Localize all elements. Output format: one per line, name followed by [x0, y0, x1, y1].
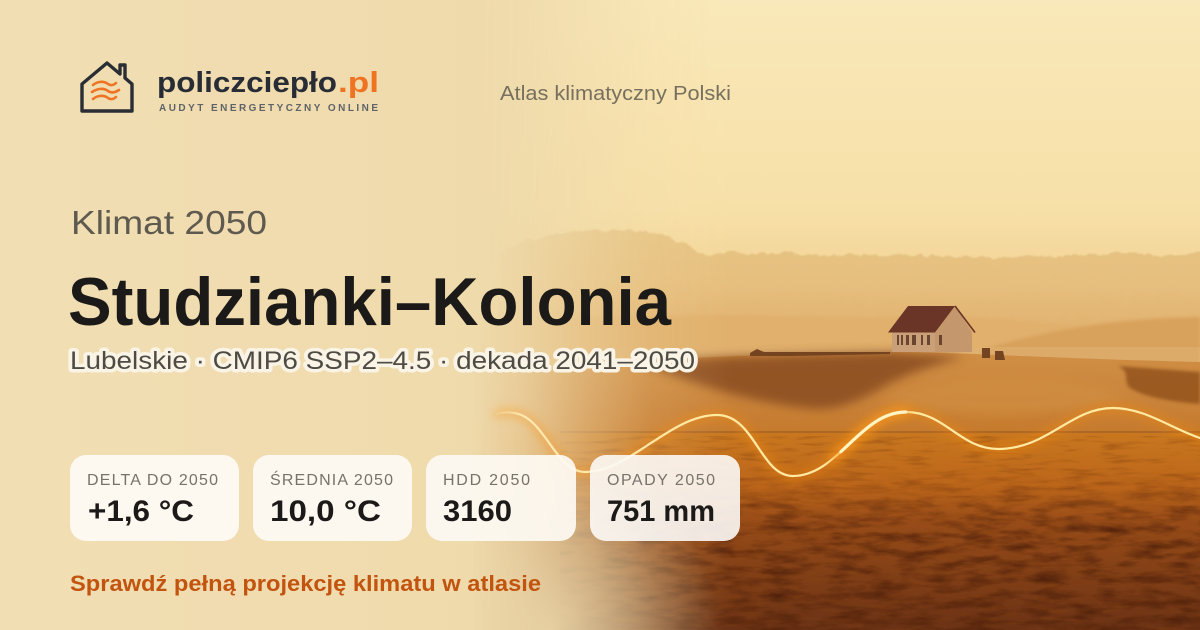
value: +1,6 °C [88, 495, 194, 528]
subtitle: Lubelskie · CMIP6 SSP2–4.5 · dekada 2041–2050 [70, 347, 695, 375]
distant treeline [540, 229, 1200, 341]
wave glow [497, 408, 1200, 476]
field [400, 432, 1200, 630]
house [750, 306, 1005, 360]
logo [82, 63, 379, 114]
tagline: AUDYT ENERGETYCZNY ONLINE [159, 103, 378, 114]
roof [888, 306, 955, 332]
glowing temperature wave [497, 408, 1200, 476]
stat card: delta [70, 455, 239, 541]
rolling dune [400, 352, 1200, 433]
card [426, 455, 576, 541]
value: 3160 [443, 495, 512, 528]
fence and bushes [750, 348, 1005, 360]
stat card: HDD [426, 455, 576, 541]
dark crop clumps [560, 470, 1200, 630]
gable edge [955, 306, 975, 332]
soft fade over bottom of the field [380, 460, 720, 630]
dune highlight [880, 378, 1130, 414]
value: 751 mm [607, 495, 715, 528]
fine crop stripes [560, 436, 1200, 630]
landscape scene [486, 0, 1200, 630]
dune shadow below house [640, 352, 965, 409]
icon: house with heat waves [82, 63, 132, 111]
wordmark: policzciepło [157, 67, 337, 99]
clump texture [560, 470, 1200, 630]
wave bright segment glow [793, 412, 906, 476]
wave core [497, 408, 1200, 476]
card [70, 455, 239, 541]
title: Studzianki–Kolonia [68, 264, 672, 340]
horizon haze strip [980, 347, 1200, 362]
far ridge [992, 316, 1200, 362]
eyebrow: Klimat 2050: Klimat 2050 [71, 204, 267, 241]
wave bright segment [793, 412, 906, 476]
wordmark suffix: .pl [338, 67, 379, 99]
card [590, 455, 740, 541]
house wall [892, 332, 937, 352]
card [253, 455, 412, 541]
dune shadow right [1118, 366, 1200, 404]
label: OPADY 2050 [607, 472, 715, 489]
call to action: Sprawdź pełną projekcję klimatu w atlasie [70, 571, 541, 596]
value: 10,0 °C [270, 495, 381, 528]
gable [935, 306, 972, 352]
windows [897, 335, 942, 345]
stat card: mean [253, 455, 412, 541]
label: HDD 2050 [443, 472, 530, 489]
sky [589, 0, 1200, 256]
atlas label: Atlas klimatyczny Polski [500, 83, 731, 105]
label: ŚREDNIA 2050 [270, 470, 393, 489]
label: DELTA DO 2050 [87, 472, 218, 489]
stat card: precipitation [590, 455, 740, 541]
mid hill [550, 318, 980, 366]
horizon line [560, 431, 1200, 433]
